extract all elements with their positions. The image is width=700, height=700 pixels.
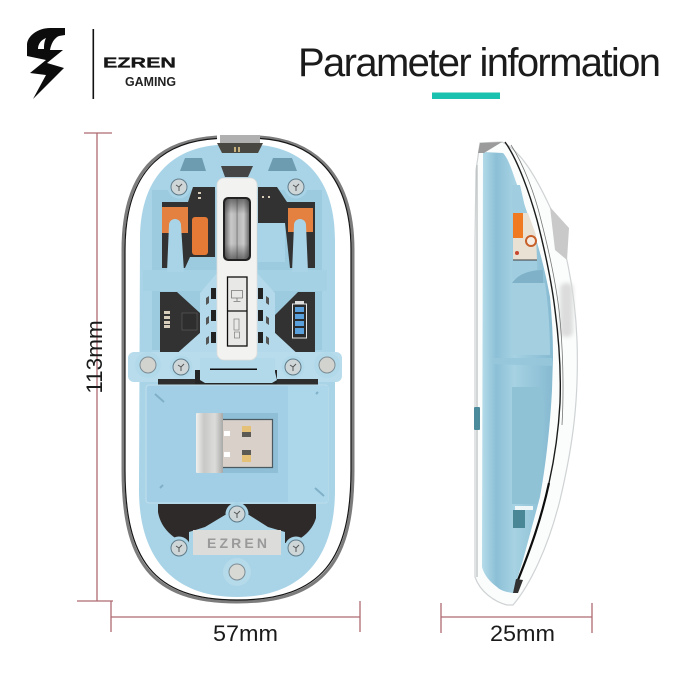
white scroll plate xyxy=(217,178,257,360)
blue cross strap xyxy=(143,270,327,291)
brand badge xyxy=(193,530,281,555)
mouse: side view xyxy=(474,142,577,605)
blurred side button xyxy=(560,283,573,337)
screw middle left xyxy=(170,356,192,378)
dimension: thickness 25mm xyxy=(441,603,592,646)
orange switch right xyxy=(288,208,313,232)
board bottom edge xyxy=(513,259,537,261)
logo divider xyxy=(92,29,94,99)
logo: Ezren Gaming xyxy=(27,28,176,99)
icon: mode switch xyxy=(234,319,240,338)
circuit board: lower left xyxy=(160,292,200,358)
post bottom xyxy=(223,558,251,586)
dark teal block xyxy=(513,510,525,528)
orange switch side xyxy=(513,213,523,238)
small components xyxy=(164,192,270,328)
screw badge top xyxy=(226,502,248,526)
screw middle right xyxy=(282,356,304,378)
chevron bracket left xyxy=(172,273,217,360)
bottom dark foot xyxy=(513,579,523,593)
dimension: height 113mm xyxy=(77,133,113,601)
height label: 113mm xyxy=(82,320,107,394)
dimension: width 57mm xyxy=(111,601,360,646)
curved ridge xyxy=(512,270,543,283)
brand name: EZREN xyxy=(103,56,176,72)
badge text: EZREN xyxy=(207,535,267,551)
clip black line xyxy=(210,368,257,370)
lower mounting band xyxy=(128,352,342,382)
transparent side shell xyxy=(475,142,577,605)
cross band xyxy=(493,358,552,366)
dongle recess xyxy=(220,413,278,473)
width label: 57mm xyxy=(213,621,278,646)
blue arm left xyxy=(167,219,184,272)
left edge line xyxy=(476,165,478,577)
screw badge left xyxy=(168,536,190,560)
shell inner edge xyxy=(125,138,351,600)
centre dark opening xyxy=(195,370,277,385)
blue inner body xyxy=(482,152,553,593)
circuit board side xyxy=(513,213,537,260)
thickness label: 25mm xyxy=(490,621,555,646)
chip xyxy=(182,313,197,330)
icon: lightning bolt xyxy=(27,28,65,99)
icon: monitor xyxy=(232,290,242,302)
mode buttons xyxy=(227,277,247,346)
white notch xyxy=(515,506,533,510)
panel corner marks xyxy=(155,392,324,496)
title: Parameter information xyxy=(298,41,661,85)
circuit board: lower right xyxy=(275,292,315,358)
recess panel lower xyxy=(512,283,550,355)
scroll wheel xyxy=(223,197,251,261)
dark base under panel xyxy=(158,504,316,543)
blue arm right xyxy=(292,219,308,272)
screw top left xyxy=(168,176,190,198)
post right xyxy=(314,352,340,378)
recess panel upper xyxy=(512,185,537,280)
centre blue clip xyxy=(200,358,277,383)
orange switch left xyxy=(162,207,188,233)
badge holder xyxy=(189,515,285,558)
screw badge right xyxy=(284,536,308,560)
post left xyxy=(135,352,161,378)
top vents xyxy=(180,158,206,171)
black shell line xyxy=(505,142,560,483)
chevron bracket right xyxy=(257,273,302,360)
top silver cap xyxy=(478,142,502,153)
inner body recess xyxy=(152,190,322,350)
usb dongle xyxy=(196,413,273,473)
red component xyxy=(515,251,519,255)
transparent outer shell xyxy=(123,137,353,602)
dark gap above panel xyxy=(158,379,318,386)
grey side key xyxy=(550,207,569,260)
screw top right xyxy=(284,176,308,198)
orange encoder xyxy=(192,217,208,255)
top connector xyxy=(217,135,263,153)
orange coil xyxy=(526,236,536,246)
side switch xyxy=(474,407,480,430)
panel right strip xyxy=(288,386,328,502)
brand subtitle: GAMING xyxy=(125,75,176,89)
lower panel: dongle storage xyxy=(146,385,328,503)
blue block right xyxy=(258,223,285,262)
title accent bar xyxy=(432,92,500,99)
circuit board: upper left xyxy=(162,187,215,268)
battery indicator xyxy=(292,301,306,338)
blue body xyxy=(139,145,335,597)
thick lower shell line xyxy=(518,483,549,580)
second shell line xyxy=(511,145,563,425)
circuit board: upper right xyxy=(258,187,315,268)
recess panel bottom xyxy=(512,387,544,504)
mouse: top view xyxy=(123,135,353,602)
